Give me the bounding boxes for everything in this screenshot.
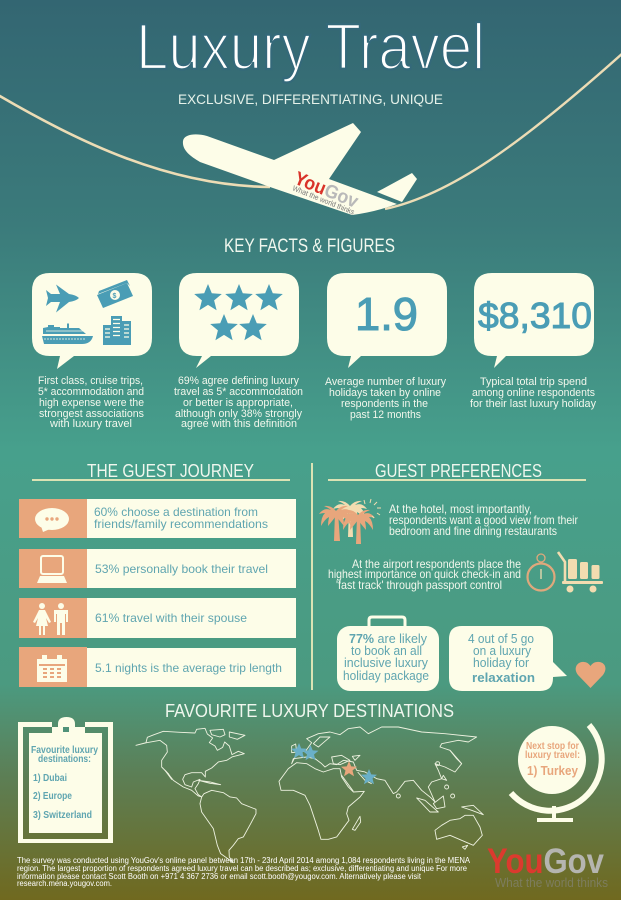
text: airport [328, 557, 521, 592]
caption: associations [38, 375, 144, 430]
caption: spend [470, 376, 596, 410]
text: hotel [389, 502, 578, 538]
footer note [17, 856, 471, 888]
text: holiday for [473, 655, 530, 670]
text: Next stop for [526, 741, 579, 752]
caption: stars: 69% agree defining luxury [178, 375, 299, 387]
text: 1) Turkey [527, 763, 579, 778]
panel: spend bubble [474, 273, 594, 368]
title: Luxury Travel [136, 10, 485, 83]
text: airport: 'fast track' through passport control [336, 578, 502, 592]
caption: holidays: respondents in the [341, 398, 428, 410]
icon: plane [46, 284, 79, 312]
caption: spend: for their last luxury holiday [470, 398, 596, 410]
row: spouse [19, 598, 296, 638]
text: destinations: [38, 754, 91, 765]
icon: palm trees [319, 499, 381, 544]
icon: calendar [37, 655, 67, 682]
plane with logo: What the world thinks [291, 184, 356, 217]
star: Europe [291, 743, 307, 758]
panel: stars bubble [179, 273, 299, 368]
caption: holidays: past 12 months [350, 409, 421, 421]
flight path right [385, 53, 621, 209]
text: 5.1 nights is the average trip length [95, 661, 282, 675]
heading: guest preferences: GUEST PREFERENCES [375, 460, 542, 481]
icon: five stars [194, 284, 283, 340]
caption: associations: First class, cruise trips, [38, 375, 143, 387]
text [525, 741, 580, 778]
panel: suitcase [337, 617, 439, 691]
text: Favourite luxury [31, 745, 98, 756]
caption: stars: or better is appropriate, [183, 397, 293, 409]
text: relaxation [472, 670, 535, 685]
subtitle: EXCLUSIVE, DIFFERENTIATING, UNIQUE [178, 91, 443, 107]
text: hotel: At the hotel, most importantly, [389, 502, 532, 516]
text: 2) Europe [33, 791, 72, 802]
text [31, 745, 98, 821]
footer note: information please contact Scott Booth on +971 4 367 2736 or email scott.booth@yougov.com. Alternatively please visit [17, 872, 422, 881]
panel: associations bubble [32, 273, 152, 369]
caption: stars [174, 375, 303, 430]
caption: associations: high expense were the [39, 397, 144, 409]
text: airport: At the airport respondents place the [352, 557, 521, 571]
text: holiday package [343, 668, 429, 683]
panel: clipboard [18, 717, 113, 843]
heading: guest journey: THE GUEST JOURNEY [87, 460, 254, 481]
text: 60% choose a destination from [94, 505, 258, 519]
text: airport: highest importance on quick check-in and [328, 567, 521, 581]
panel: 1.9 bubble [327, 273, 447, 368]
text: 4 out of 5 go [468, 631, 534, 646]
text [94, 505, 268, 531]
caption: stars: travel as 5* accommodation [174, 386, 303, 398]
text: friends/family recommendations [94, 517, 268, 531]
text: on a luxury [473, 643, 531, 658]
icon: laptop [37, 556, 67, 583]
icon: heart [576, 662, 605, 688]
star: Turkey [341, 761, 357, 776]
caption: associations: with luxury travel [49, 418, 132, 430]
footer note: The survey was conducted using YouGov's online panel between 17th - 23rd April 2014 among 1,084 respondents living in the MENA [17, 856, 471, 865]
plane with logo [183, 123, 417, 217]
text: 3) Switzerland [33, 810, 92, 821]
caption: spend: Typical total trip spend [480, 376, 587, 388]
text: 1) Dubai [33, 773, 67, 784]
caption: stars: agree with this definition [181, 418, 297, 430]
heading: key facts: KEY FACTS & FIGURES [224, 236, 395, 257]
caption: stars: although only 38% strongly [175, 408, 302, 420]
text: 61% travel with their spouse [95, 611, 247, 625]
plane with logo: YouGov [291, 168, 361, 213]
caption: associations: 5* accommodation and [38, 386, 144, 398]
star: Switzerland [302, 745, 318, 760]
row: recommendations [19, 499, 296, 538]
text: 77% are likely [349, 631, 427, 646]
row: booking [19, 549, 296, 588]
icon: building [103, 316, 131, 345]
caption: associations: strongest associations [39, 408, 144, 420]
panel: relaxation bubble [449, 626, 567, 691]
icon: money: $ [112, 293, 116, 300]
text: luxury travel: [525, 750, 580, 761]
text: hotel: bedroom and fine dining restaurants [389, 524, 557, 538]
text: hotel: respondents want a good view from their [389, 513, 578, 527]
footer note: research.mena.yougov.com. [17, 879, 112, 888]
icon: luggage trolley [558, 552, 603, 592]
number: spend: $8,310 [478, 295, 592, 336]
text: inclusive luxury [344, 655, 428, 670]
caption: holidays: holidays taken by online [329, 387, 441, 399]
star: Dubai [361, 769, 377, 784]
caption: spend: among online respondents [472, 387, 595, 399]
text [343, 631, 429, 683]
footer note: region. The largest proportion of respondents agreed luxury travel can be described as; exclusive, differentiating and unique For more [17, 864, 468, 873]
icon: globe with next stop [511, 725, 602, 820]
text [468, 631, 535, 685]
icon: ship [42, 324, 93, 344]
flight path left [0, 95, 270, 187]
row: trip length [19, 647, 296, 687]
icon: stopwatch [528, 554, 554, 590]
text: to book an all [351, 643, 422, 658]
YouGov logo: YouGov [487, 842, 604, 881]
caption: holidays: Average number of luxury [325, 376, 446, 388]
caption: holidays [325, 376, 446, 421]
icon: chat [35, 508, 69, 532]
heading: favourite destinations: FAVOURITE LUXURY DESTINATIONS [165, 700, 454, 721]
world map [136, 727, 483, 863]
number: 1.9: 1.9 [355, 288, 418, 340]
text: 53% personally book their travel [95, 562, 268, 576]
YouGov logo: What the world thinks [495, 875, 608, 890]
icon: couple [33, 603, 68, 635]
